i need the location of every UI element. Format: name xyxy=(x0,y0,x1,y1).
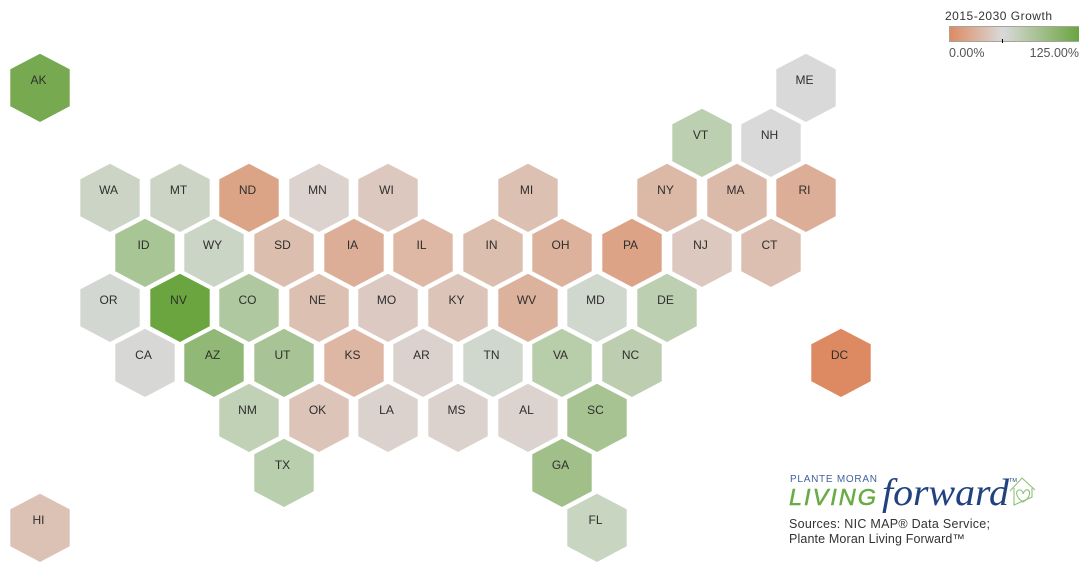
VA: VA xyxy=(553,348,568,362)
ND xyxy=(219,164,279,232)
IL: IL xyxy=(416,238,427,252)
NC xyxy=(602,329,662,397)
VT xyxy=(672,109,732,177)
UT xyxy=(254,329,314,397)
DE: DE xyxy=(657,293,674,307)
ID: ID xyxy=(138,238,150,252)
MI xyxy=(498,164,558,232)
PA: PA xyxy=(623,238,638,252)
AL: AL xyxy=(519,403,534,417)
WA: WA xyxy=(99,183,118,197)
MD: MD xyxy=(586,293,605,307)
GA xyxy=(532,439,592,507)
SC: SC xyxy=(587,403,604,417)
LA xyxy=(358,384,418,452)
MN xyxy=(289,164,349,232)
ME xyxy=(776,54,836,122)
WV xyxy=(498,274,558,342)
DE xyxy=(637,274,697,342)
AR: AR xyxy=(413,348,430,362)
MT: MT xyxy=(170,183,188,197)
MA: MA xyxy=(726,183,744,197)
LA: LA xyxy=(379,403,394,417)
CA xyxy=(115,329,175,397)
WA xyxy=(80,164,140,232)
ME: ME xyxy=(796,73,814,87)
MO xyxy=(358,274,418,342)
IA xyxy=(324,219,384,287)
logo word: forward: forward xyxy=(882,472,1010,514)
TN xyxy=(463,329,523,397)
PA xyxy=(602,219,662,287)
OH xyxy=(532,219,592,287)
CT xyxy=(741,219,801,287)
NY xyxy=(637,164,697,232)
NH: NH xyxy=(761,128,778,142)
MO: MO xyxy=(377,293,396,307)
VA xyxy=(532,329,592,397)
KY xyxy=(428,274,488,342)
FL xyxy=(567,494,627,562)
NM: NM xyxy=(238,403,257,417)
MA xyxy=(707,164,767,232)
OR xyxy=(80,274,140,342)
AR xyxy=(393,329,453,397)
IA: IA xyxy=(347,238,358,252)
legend title: 2015-2030 Growth xyxy=(945,9,1052,23)
CO: CO xyxy=(238,293,256,307)
RI: RI xyxy=(798,183,810,197)
legend gradient bar xyxy=(950,26,1079,42)
ND: ND xyxy=(239,183,256,197)
sources text: Plante Moran Living Forward™ xyxy=(789,532,965,546)
AK xyxy=(10,54,70,122)
NV: NV xyxy=(170,293,187,307)
WI xyxy=(358,164,418,232)
HI xyxy=(10,494,70,562)
legend midpoint tick xyxy=(1002,39,1003,43)
NE: NE xyxy=(309,293,326,307)
sources text: Sources: NIC MAP® Data Service; xyxy=(789,517,990,531)
KY: KY xyxy=(448,293,465,307)
IL xyxy=(393,219,453,287)
AL xyxy=(498,384,558,452)
NC: NC xyxy=(622,348,639,362)
MS xyxy=(428,384,488,452)
SD xyxy=(254,219,314,287)
OK xyxy=(289,384,349,452)
logo line: Plante Moran: PLANTE MORAN xyxy=(790,474,877,485)
CO xyxy=(219,274,279,342)
FL: FL xyxy=(588,513,603,527)
logo trademark: TM xyxy=(1009,478,1017,484)
WV: WV xyxy=(517,293,536,307)
TN: TN xyxy=(484,348,500,362)
logo: Plante Moran Living Forward xyxy=(789,472,1035,514)
MS: MS xyxy=(448,403,466,417)
ID xyxy=(115,219,175,287)
legend min label: 0.00% xyxy=(949,46,984,60)
NV xyxy=(150,274,210,342)
HI: HI xyxy=(32,513,44,527)
KS xyxy=(324,329,384,397)
AZ: AZ xyxy=(205,348,220,362)
IN: IN xyxy=(486,238,498,252)
IN xyxy=(463,219,523,287)
icon: house with heart xyxy=(1010,478,1035,505)
legend max label: 125.00% xyxy=(1030,46,1079,60)
OH: OH xyxy=(552,238,570,252)
GA: GA xyxy=(552,458,569,472)
CT: CT xyxy=(762,238,778,252)
NJ xyxy=(672,219,732,287)
SD: SD xyxy=(274,238,291,252)
AZ xyxy=(184,329,244,397)
NM xyxy=(219,384,279,452)
OK: OK xyxy=(309,403,326,417)
NH xyxy=(741,109,801,177)
KS: KS xyxy=(344,348,361,362)
NY: NY xyxy=(657,183,674,197)
logo word: Living: LIVING xyxy=(789,484,876,510)
RI xyxy=(776,164,836,232)
TX: TX xyxy=(275,458,290,472)
MI: MI xyxy=(520,183,533,197)
WY xyxy=(184,219,244,287)
CA: CA xyxy=(135,348,152,362)
UT: UT xyxy=(274,348,291,362)
WI: WI xyxy=(379,183,394,197)
MT xyxy=(150,164,210,232)
MN: MN xyxy=(308,183,327,197)
SC xyxy=(567,384,627,452)
WY: WY xyxy=(203,238,222,252)
sources text xyxy=(789,517,990,546)
DC: DC xyxy=(831,348,848,362)
hexagon tile map xyxy=(10,54,871,562)
DC xyxy=(811,329,871,397)
VT: VT xyxy=(693,128,709,142)
AK: AK xyxy=(30,73,47,87)
NJ: NJ xyxy=(693,238,708,252)
NE xyxy=(289,274,349,342)
OR: OR xyxy=(100,293,118,307)
legend xyxy=(945,9,1079,60)
MD xyxy=(567,274,627,342)
TX xyxy=(254,439,314,507)
